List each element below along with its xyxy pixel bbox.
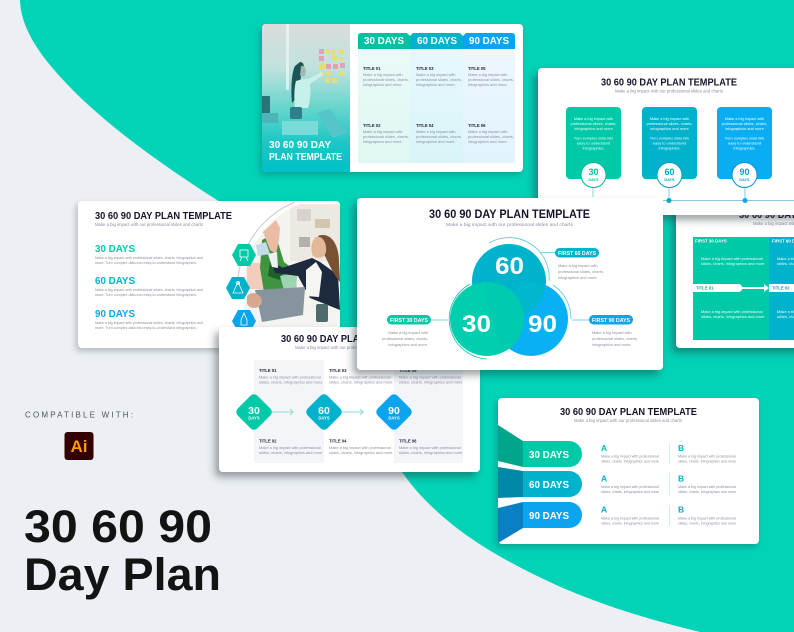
timeline axis: [663, 186, 794, 203]
table text: infographics and more.: [363, 139, 403, 144]
column texts: Make a big impact with professional: [329, 374, 391, 380]
card: 90 days: DAYS: [739, 178, 750, 182]
block: 30 days: Make a big impact with professional slides, charts, infographics and: [95, 255, 203, 260]
table text: Make a big impact with: [363, 72, 403, 77]
subheading: Make a big impact with our professional slides and charts: [615, 88, 724, 94]
callout: first 30 days: professional slides, charts,: [382, 336, 428, 341]
column texts: TITLE 04: [329, 438, 347, 444]
card: 30 days: Turn complex data into: [574, 136, 613, 140]
card: 90 days: easy to understand: [728, 140, 761, 146]
heading: 30 60 90 DAY PLAN TEMPLATE: [95, 210, 232, 222]
row: 90 days A and B: B: [678, 504, 684, 514]
column texts: TITLE 02: [259, 438, 277, 444]
callout: first 90 days: [572, 315, 638, 347]
photo: woman at sticky notes: PLAN TEMPLATE: [269, 152, 342, 163]
outer rings: [489, 238, 549, 281]
table text: TITLE 05: [468, 66, 486, 71]
arrow bar: title 01 to title 02: TITLE 02: [772, 286, 790, 290]
callout: first 90 days: professional slides, charts,: [592, 336, 638, 341]
venn diagram: 30: [462, 311, 491, 338]
block: 60 days: Make a big impact with professional slides, charts, infographics and: [95, 287, 203, 292]
diamond: 90 days: [374, 392, 414, 432]
table text: professional slides, charts,: [416, 134, 462, 139]
row: 90 days A and B: [601, 504, 736, 526]
card: 60 days: professional slides, charts,: [647, 121, 692, 126]
row: 60 days A and B: slides, charts, infographics and more: [678, 489, 736, 494]
row: 90 days A and B: slides, charts, infographics and more: [601, 520, 659, 526]
block: 30 days: [95, 244, 203, 265]
icon: Adobe Illustrator: [64, 432, 94, 460]
table text: professional slides, charts,: [363, 134, 409, 139]
arrow: 60 to 90: [341, 409, 363, 415]
main title: [24, 501, 221, 600]
diamond: 30 days: DAYS: [248, 416, 260, 420]
table text: infographics and more.: [468, 139, 508, 144]
card: 90 days: infographics and more: [725, 126, 764, 131]
block: 90 days: Make a big impact with professional slides, charts, infographics and: [95, 320, 203, 325]
grid block: first 30 days: slides, charts, infographics and more: [701, 261, 764, 266]
table text: TITLE 01: [363, 66, 381, 71]
column texts: [259, 368, 462, 455]
heading: 30 60 90 DAY PLAN TEMPLATE: [281, 333, 418, 345]
diamond: 90 days: 90: [388, 405, 400, 417]
grid block: first 30 days: Make a big impact with professional: [701, 256, 763, 261]
row: 60 days A and B: [601, 473, 736, 495]
table text: infographics and more.: [416, 82, 456, 87]
ribbon: 60 days: 60 DAYS: [529, 480, 569, 491]
card: 30 days: [566, 107, 621, 197]
card: 90 days: Turn complex data into: [725, 136, 764, 140]
column texts: Make a big impact with professional: [259, 374, 321, 380]
block: 60 days: more. Turn complex data into easy-to-understand infographics.: [95, 292, 197, 297]
column texts: slides, charts, infographics and more: [329, 450, 392, 455]
card: 30 days: 30: [588, 167, 599, 177]
card: 60 days: [642, 107, 697, 188]
ribbon: 90 days: 90 DAYS: [529, 511, 569, 522]
row: 30 days A and B: A: [601, 443, 607, 453]
card: 60 days: DAYS: [664, 178, 675, 182]
card: 30 days: easy to understand: [577, 140, 610, 146]
card: 60 days: Make a big impact with: [650, 116, 689, 121]
grid block: first 30 days: FIRST 30 DAYS: [695, 238, 727, 244]
block: 60 days: [95, 276, 203, 297]
heading: 30 60 90 DAY PLAN TEMPLATE: [429, 207, 590, 221]
block: 90 days: [95, 309, 203, 330]
table text: Make a big impact with: [416, 72, 456, 77]
card: 30 days: infographics.: [582, 146, 605, 150]
panel: arrow grid slide: [676, 190, 794, 348]
column texts: Make a big impact with professional: [399, 445, 461, 450]
diamond: 30 days: [234, 392, 274, 432]
column texts: slides, charts, infographics and more: [399, 380, 462, 384]
card: 30 days: professional slides, charts,: [571, 121, 616, 126]
card: 30 days: infographics and more: [574, 126, 613, 131]
grid block: first 30 days: slides, charts, infographics and more: [701, 314, 764, 319]
card: 30 days: DAYS: [588, 178, 599, 182]
icon: Adobe Illustrator: Ai: [70, 437, 88, 456]
tab: 30 days: [358, 33, 410, 49]
card: 90 days: 90: [739, 167, 750, 177]
row: 30 days A and B: B: [678, 443, 684, 453]
column texts: slides, charts, infographics and more: [259, 380, 322, 384]
card: 60 days: easy to understand: [653, 140, 686, 146]
callout: first 90 days: infographics and more.: [592, 342, 632, 347]
card: 90 days: professional slides, charts,: [722, 121, 767, 126]
column texts: TITLE 03: [329, 368, 347, 373]
tab: 30 days: 30 DAYS: [364, 36, 404, 47]
card: 60 days: 60: [664, 167, 675, 177]
venn diagram: 90: [528, 311, 557, 338]
table text: [363, 66, 514, 144]
ribbon: 90 days: [498, 502, 582, 543]
subheading: Make a big impact with our professional slides and charts: [446, 222, 574, 227]
row: 30 days A and B: [601, 443, 736, 464]
block: 90 days: 90 DAYS: [95, 309, 135, 320]
table text: Make a big impact with: [468, 72, 508, 77]
block: 90 days: more. Turn complex data into easy-to-understand infographics.: [95, 325, 197, 330]
icon: hexagon 3: [232, 310, 256, 332]
panel: venn diagram slide: [357, 198, 663, 370]
card: 60 days: infographics and more: [650, 126, 689, 131]
column texts: TITLE 01: [259, 368, 277, 373]
diamond: 30 days: 30: [248, 405, 260, 417]
heading: 30 60 90 DAY PLAN TEMPLATE: [601, 76, 737, 88]
decorative photo ring: [238, 202, 295, 296]
panel: timeline cards slide: [538, 68, 794, 215]
grid block: first 60 days: [769, 237, 794, 340]
panel: hexagon slide with photo: [78, 201, 340, 348]
diamond: 60 days: [304, 392, 344, 432]
heading: 30 60 90 DAY PLAN TEMPLATE: [560, 406, 697, 418]
card: 60 days: Turn complex data into: [650, 136, 689, 140]
callout: first 90 days: Make a big impact with: [592, 330, 632, 335]
compatible with label: COMPATIBLE WITH:: [25, 410, 133, 420]
table text: infographics and more.: [416, 139, 456, 144]
block: 60 days: 60 DAYS: [95, 276, 135, 287]
block: 30 days: 30 DAYS: [95, 244, 135, 255]
card: 90 days: [717, 107, 772, 188]
callout: first 60 days: FIRST 60 DAYS: [558, 251, 597, 257]
row: 30 days A and B: Make a big impact with professional: [678, 454, 736, 458]
arrow bar: title 01 to title 02: TITLE 01: [696, 286, 714, 290]
ribbon: 30 days: 30 DAYS: [529, 450, 569, 461]
table text: TITLE 02: [363, 123, 381, 128]
block: 30 days: more. Turn complex data into easy-to-understand infographics.: [95, 260, 197, 265]
arrow: 30 to 60: [271, 409, 293, 415]
table text: TITLE 06: [468, 123, 486, 128]
callout: first 60 days: professional slides, charts,: [558, 269, 604, 274]
ribbon: 60 days: [498, 467, 582, 498]
venn labels: 60: [495, 253, 524, 280]
table text: Make a big impact with: [416, 129, 456, 134]
column texts: Make a big impact with professional: [329, 445, 391, 450]
subheading: Make a big impact with our professional slides and charts: [295, 345, 404, 350]
table text: professional slides, charts,: [416, 77, 462, 82]
panel: diamond flow slide: [219, 327, 480, 472]
card: 90 days: Make a big impact with: [725, 116, 764, 121]
column texts: slides, charts, infographics and more: [399, 450, 462, 455]
photo: high five at office: [238, 201, 340, 328]
table text: TITLE 04: [416, 123, 434, 128]
card: 90 days: infographics.: [733, 146, 756, 150]
callout: first 60 days: Make a big impact with: [558, 263, 598, 268]
tab: 90 days: [463, 33, 515, 49]
callout: first 60 days: infographics and more.: [558, 275, 598, 280]
row: 60 days A and B: B: [678, 474, 684, 484]
column texts: Make a big impact with professional: [259, 445, 321, 450]
callout: first 60 days: [540, 248, 604, 280]
row: 30 days A and B: Make a big impact with professional: [601, 454, 659, 458]
table columns: [358, 49, 515, 163]
icon: hexagon 2: [226, 277, 250, 299]
venn diagram: [449, 238, 571, 359]
callout: first 30 days: Make a big impact with: [388, 330, 428, 335]
column texts: TITLE 05: [399, 368, 417, 373]
row: 30 days A and B: slides, charts, infographics and more: [678, 458, 736, 464]
photo: woman at sticky notes: [262, 24, 350, 172]
row: 30 days A and B: slides, charts, infographics and more: [601, 458, 659, 464]
card: 60 days: infographics.: [658, 146, 681, 150]
diamond: 60 days: 60: [318, 405, 330, 417]
table text: professional slides, charts,: [363, 77, 409, 82]
column texts: slides, charts, infographics and more: [259, 450, 322, 455]
callout: first 30 days: infographics and more.: [388, 342, 428, 347]
table text: Make a big impact with: [363, 129, 403, 134]
tab: 60 days: [410, 33, 463, 49]
table text: Make a big impact with: [468, 129, 508, 134]
row: 60 days A and B: Make a big impact with professional: [678, 484, 736, 489]
callout: first 30 days: FIRST 30 DAYS: [390, 318, 429, 324]
column texts: Make a big impact with professional: [399, 374, 461, 380]
row: 90 days A and B: Make a big impact with professional: [678, 516, 736, 520]
callout: first 30 days: [382, 315, 448, 347]
table text: TITLE 03: [416, 66, 434, 71]
arrow bar: title 01 to title 02: [693, 284, 794, 292]
tab: 60 days: 60 DAYS: [417, 36, 457, 47]
column texts: slides, charts, infographics and more: [329, 380, 392, 384]
row: 60 days A and B: Make a big impact with professional: [601, 484, 659, 489]
subheading: Make a big impact with our professional slides and charts: [574, 418, 683, 423]
row: 90 days A and B: A: [601, 504, 607, 514]
column texts: TITLE 06: [399, 438, 417, 444]
panel: ribbon list slide: [498, 398, 759, 544]
subheading: Make a big impact with our professional slides and charts: [95, 222, 204, 227]
row: 60 days A and B: slides, charts, infographics and more: [601, 489, 659, 494]
row: 60 days A and B: A: [601, 474, 607, 484]
row: 90 days A and B: slides, charts, infographics and more: [678, 520, 736, 526]
main title: 30 60 90: [24, 501, 212, 552]
table text: professional slides, charts,: [468, 134, 514, 139]
diamond: 60 days: DAYS: [318, 416, 330, 420]
photo caption: 30 60 90 DAY: [269, 140, 331, 151]
ribbon: 30 days: [498, 425, 582, 467]
diamond: 90 days: DAYS: [388, 416, 400, 420]
grid block: first 30 days: Make a big impact with professional: [701, 309, 763, 314]
callout: first 90 days: FIRST 90 DAYS: [592, 318, 631, 324]
card: 30 days: Make a big impact with: [574, 116, 613, 121]
column backgrounds: [254, 360, 463, 463]
row: 90 days A and B: Make a big impact with professional: [601, 516, 659, 520]
main title: Day Plan: [24, 549, 221, 600]
panel: table slide with photo: [262, 24, 523, 172]
icon: hexagon 1: [232, 244, 256, 266]
table text: professional slides, charts,: [468, 77, 514, 82]
tab: 90 days: 90 DAYS: [469, 36, 509, 47]
table text: infographics and more.: [363, 82, 403, 87]
grid block: first 30 days: [693, 237, 769, 340]
table text: infographics and more.: [468, 82, 508, 87]
